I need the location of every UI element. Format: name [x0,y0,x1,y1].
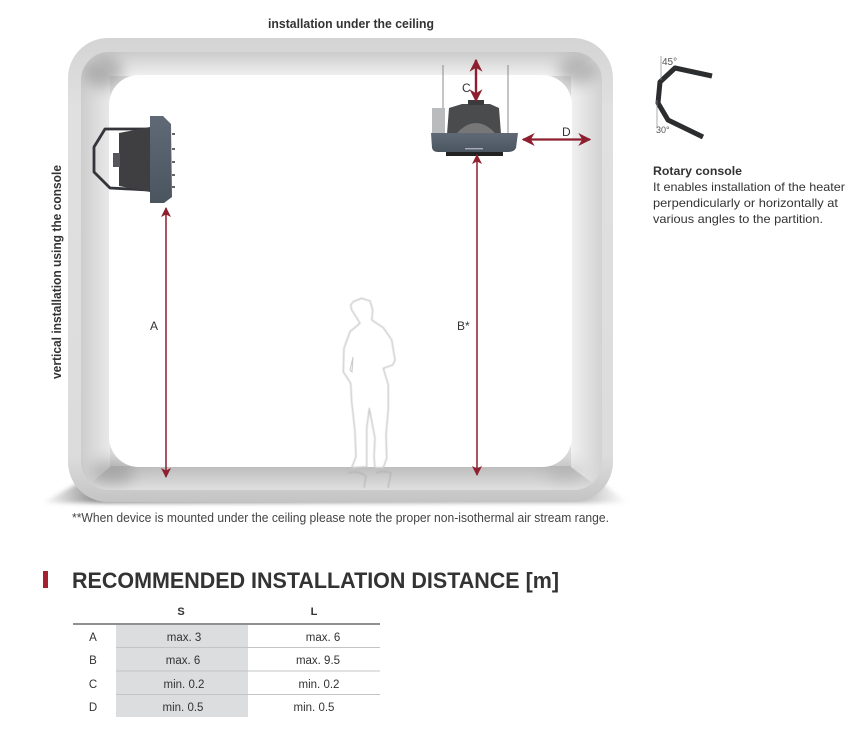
table column S values [163,632,204,714]
table column L values [294,632,340,714]
arrow: C: C [462,81,471,95]
room frame [42,38,628,503]
table column S values: max. 3 [167,632,201,644]
table row labels [89,632,97,714]
heading: installation under the ceiling: installation under the ceiling [268,17,434,31]
table row labels: D [89,702,97,714]
heater: ceiling mounted [431,65,518,156]
arrow: C [462,60,476,101]
text block: rotary console: Rotary console [653,164,742,178]
arrow: D [523,125,590,140]
arrow: D: D [562,125,571,139]
table column S values: max. 6 [166,655,200,667]
text block: rotary console: It enables installation of the heater [653,180,845,194]
table header row: L [311,606,318,618]
icon: rotary console bracket: 45° [662,57,677,68]
vertical label: vertical installation using the console: vertical installation using the console [50,165,64,379]
text block: rotary console: various angles to the partition. [653,212,823,226]
person silhouette [343,298,395,488]
footnote: **When device is mounted under the ceiling please note the proper non-isothermal air stream range. [72,511,609,525]
icon: rotary console bracket: 30° [656,125,670,135]
arrow: B: B* [457,319,470,333]
heater: wall mounted on console [94,116,175,203]
icon: rotary console bracket [656,56,712,137]
table column L values: min. 0.5 [294,702,334,714]
table column S values: min. 0.5 [163,702,203,714]
text block: rotary console: perpendicularly or horizontally at [653,196,839,210]
table column S values: min. 0.2 [164,679,204,691]
table column L values: max. 6 [306,632,340,644]
table row labels: C [89,679,97,691]
section heading: recommended installation distance: RECOMMENDED INSTALLATION DISTANCE [m] [72,568,559,593]
table row labels: B [89,655,97,667]
table column L values: max. 9.5 [296,655,340,667]
table: recommended distances [73,606,380,717]
table header row: S [177,606,185,618]
table header row [177,606,318,618]
table column L values: min. 0.2 [299,679,339,691]
text block: rotary console [653,164,845,226]
table row labels: A [89,632,97,644]
arrow: A: A [150,319,158,333]
